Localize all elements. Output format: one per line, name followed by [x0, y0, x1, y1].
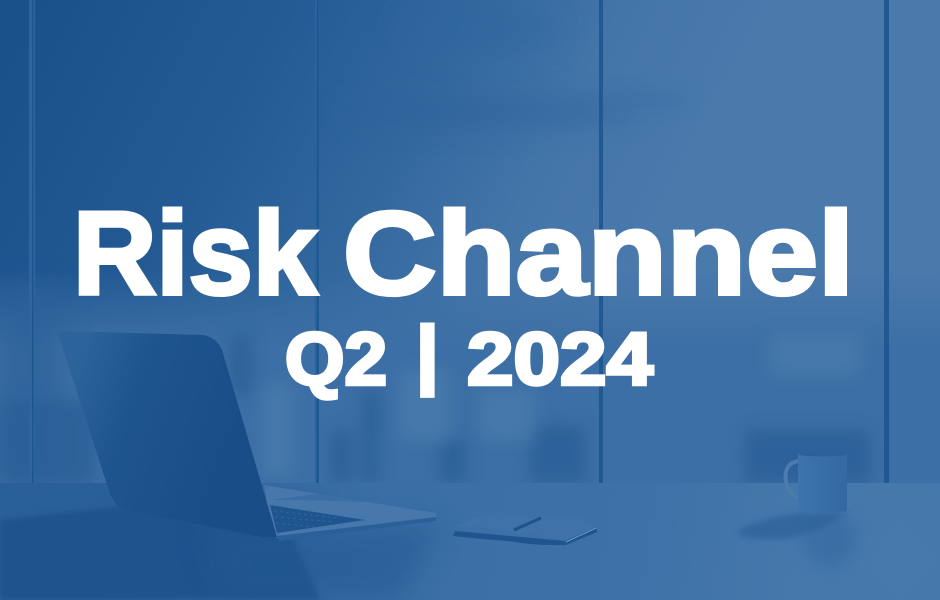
icon: laptop: [59, 331, 436, 541]
subtitle: |: [417, 312, 438, 396]
title: Channel: [343, 188, 854, 320]
subtitle: 2024: [467, 318, 653, 400]
desk surface: [0, 483, 940, 600]
icon: notebook and pen: [453, 512, 597, 545]
title: [73, 188, 854, 320]
icon: coffee mug: [737, 452, 847, 539]
title: Risk: [73, 188, 317, 320]
subtitle: [285, 312, 653, 400]
window frame lines: [29, 0, 889, 484]
subtitle: Q2: [285, 318, 387, 400]
